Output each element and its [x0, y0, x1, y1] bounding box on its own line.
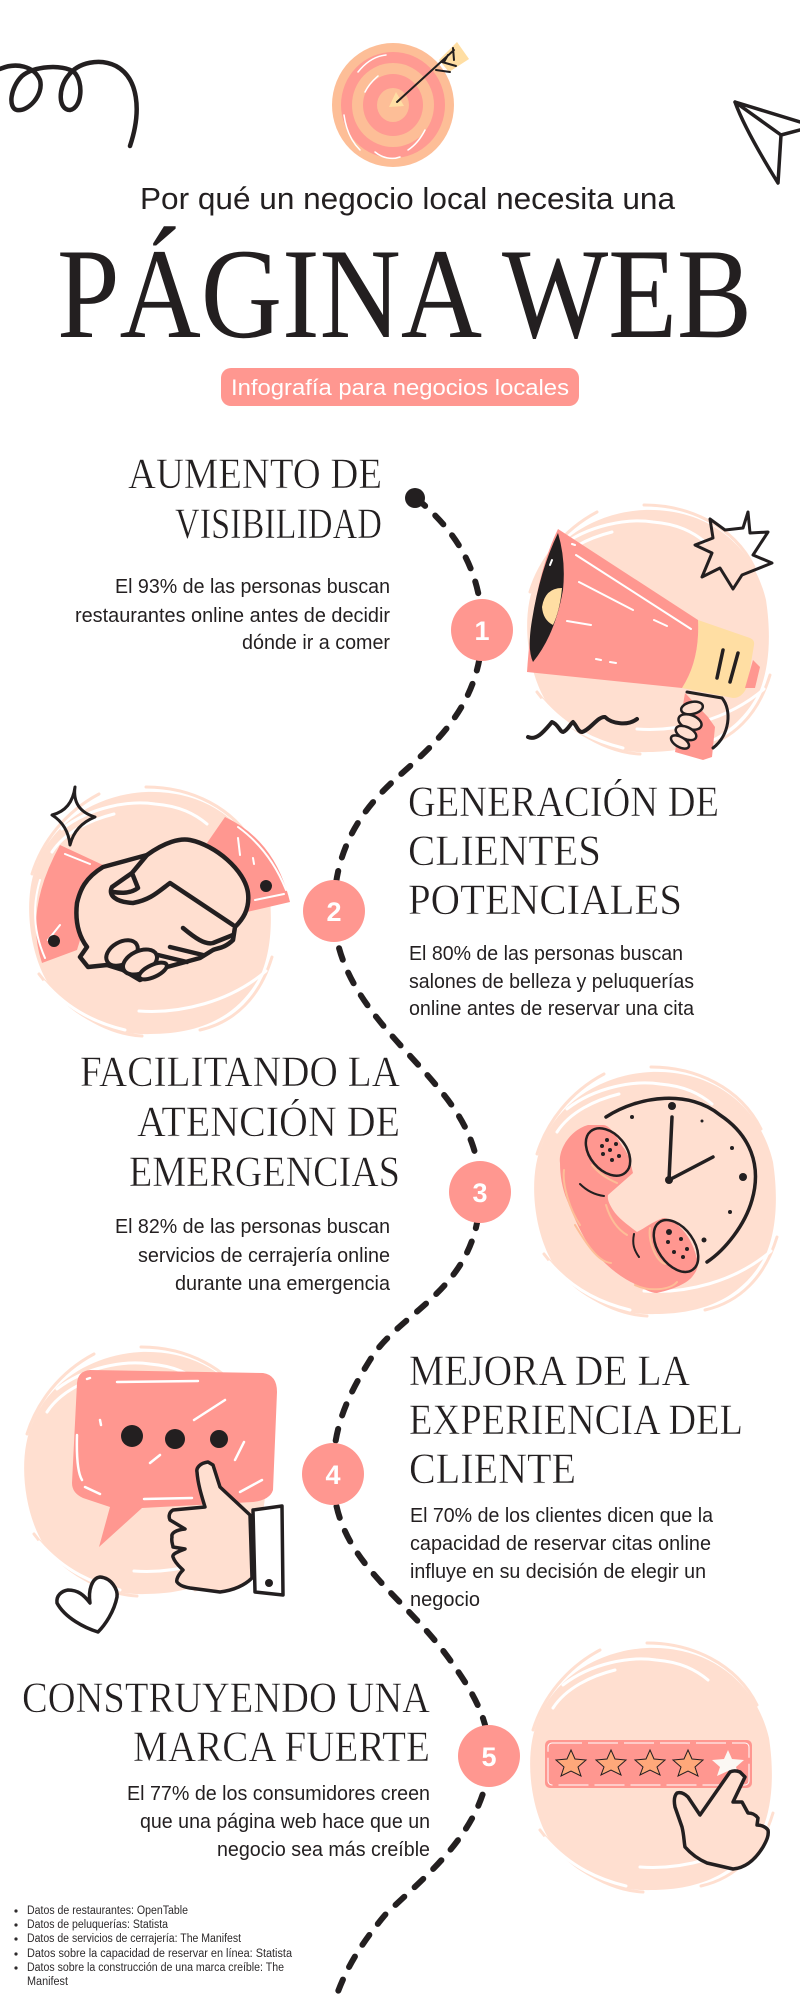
timeline start dot	[405, 488, 425, 508]
body text 5: negocio sea más creíble	[217, 1839, 430, 1861]
number badge 5	[458, 1725, 520, 1787]
heading: generación de clientes potenciales	[408, 779, 719, 924]
body text 2: El 80% de las personas buscan	[409, 943, 683, 965]
body text 1: El 93% de las personas buscan	[115, 576, 390, 598]
body text 4	[410, 1505, 714, 1611]
panel: section 5	[22, 1643, 773, 1892]
number badge 3: 3	[472, 1178, 488, 1208]
icon: star rating with hand	[530, 1643, 773, 1892]
heading: mejora de la experiencia del cliente: EXPERIENCIA DEL	[409, 1397, 743, 1444]
panel: section 4	[24, 1347, 743, 1632]
subtitle pill	[221, 368, 579, 406]
sparkle doodle	[52, 787, 95, 845]
heading: aumento de visibilidad: VISIBILIDAD	[175, 501, 382, 548]
body text 3: durante una emergencia	[175, 1273, 391, 1295]
wavy doodle	[528, 717, 637, 738]
icon: paper plane	[735, 102, 800, 183]
heading: generación de clientes potenciales: GENERACIÓN DE	[408, 779, 719, 826]
heading: construyendo una marca fuerte	[22, 1675, 430, 1771]
number badge 3	[449, 1161, 511, 1223]
body text 1: restaurantes online antes de decidir	[75, 605, 390, 627]
heading: aumento de visibilidad: AUMENTO DE	[128, 451, 382, 498]
number badge 1: 1	[474, 616, 490, 646]
sources list: Datos de peluquerías: Statista	[27, 1919, 169, 1931]
body text 1	[75, 576, 390, 654]
body text 1: dónde ir a comer	[242, 632, 390, 654]
number badge 4	[302, 1443, 364, 1505]
icon: speech bubble and thumbs up	[24, 1347, 283, 1632]
panel: section 3	[80, 1049, 777, 1316]
body text 2: salones de belleza y peluquerías	[409, 971, 694, 993]
heading: mejora de la experiencia del cliente: CLIENTE	[409, 1446, 576, 1493]
body text 3	[115, 1216, 391, 1295]
number badge 2	[303, 880, 365, 942]
sources list: Datos sobre la construcción de una marca creíble: The	[27, 1962, 284, 1974]
icon: megaphone	[527, 505, 772, 760]
panel: section 1	[75, 451, 772, 760]
body text 2: online antes de reservar una cita	[409, 998, 695, 1020]
title intro line: Por qué un negocio local necesita una	[140, 181, 676, 216]
body text 4: negocio	[410, 1589, 480, 1611]
heading: facilitando la atención de emergencias: FACILITANDO LA	[80, 1049, 400, 1096]
dashed timeline path	[333, 498, 489, 2000]
body text 5	[127, 1783, 430, 1861]
heading: aumento de visibilidad	[128, 451, 382, 548]
panel: section 2	[29, 779, 719, 1036]
subtitle pill: Infografía para negocios locales	[231, 375, 569, 400]
heading: construyendo una marca fuerte: CONSTRUYENDO UNA	[22, 1675, 430, 1722]
icon: target with arrow	[332, 42, 469, 167]
heading: facilitando la atención de emergencias	[80, 1049, 400, 1196]
body text 3: servicios de cerrajería online	[138, 1245, 390, 1267]
heading: construyendo una marca fuerte: MARCA FUERTE	[133, 1724, 430, 1771]
number badge 1	[451, 599, 513, 661]
body text 2	[409, 943, 695, 1020]
body text 5: El 77% de los consumidores creen	[127, 1783, 430, 1805]
body text 5: que una página web hace que un	[140, 1811, 430, 1833]
heading: mejora de la experiencia del cliente: MEJORA DE LA	[409, 1348, 690, 1395]
number badge 5: 5	[481, 1742, 497, 1772]
heading: facilitando la atención de emergencias: EMERGENCIAS	[129, 1149, 400, 1196]
sources list: Datos de restaurantes: OpenTable	[27, 1905, 188, 1917]
heading: generación de clientes potenciales: POTENCIALES	[408, 877, 682, 924]
body text 3: El 82% de las personas buscan	[115, 1216, 390, 1238]
burst star doodle	[695, 512, 772, 589]
sources list: Manifest	[27, 1976, 69, 1988]
number badge 2: 2	[326, 897, 342, 927]
sources list	[14, 1905, 293, 1988]
decorative squiggle	[0, 62, 137, 146]
body text 4: influye en su decisión de elegir un	[410, 1561, 706, 1583]
icon: handshake	[29, 787, 290, 1036]
sources list: Datos sobre la capacidad de reservar en línea: Statista	[27, 1948, 293, 1960]
heading: generación de clientes potenciales: CLIENTES	[408, 828, 601, 875]
icon: phone and clock	[534, 1067, 777, 1316]
heading: facilitando la atención de emergencias: ATENCIÓN DE	[137, 1099, 400, 1146]
body text 4: capacidad de reservar citas online	[410, 1533, 711, 1555]
heart doodle	[57, 1577, 117, 1632]
number badge 4: 4	[325, 1460, 341, 1490]
heading: mejora de la experiencia del cliente	[409, 1348, 743, 1493]
body text 4: El 70% de los clientes dicen que la	[410, 1505, 714, 1527]
sources list: Datos de servicios de cerrajería: The Manifest	[27, 1933, 242, 1945]
